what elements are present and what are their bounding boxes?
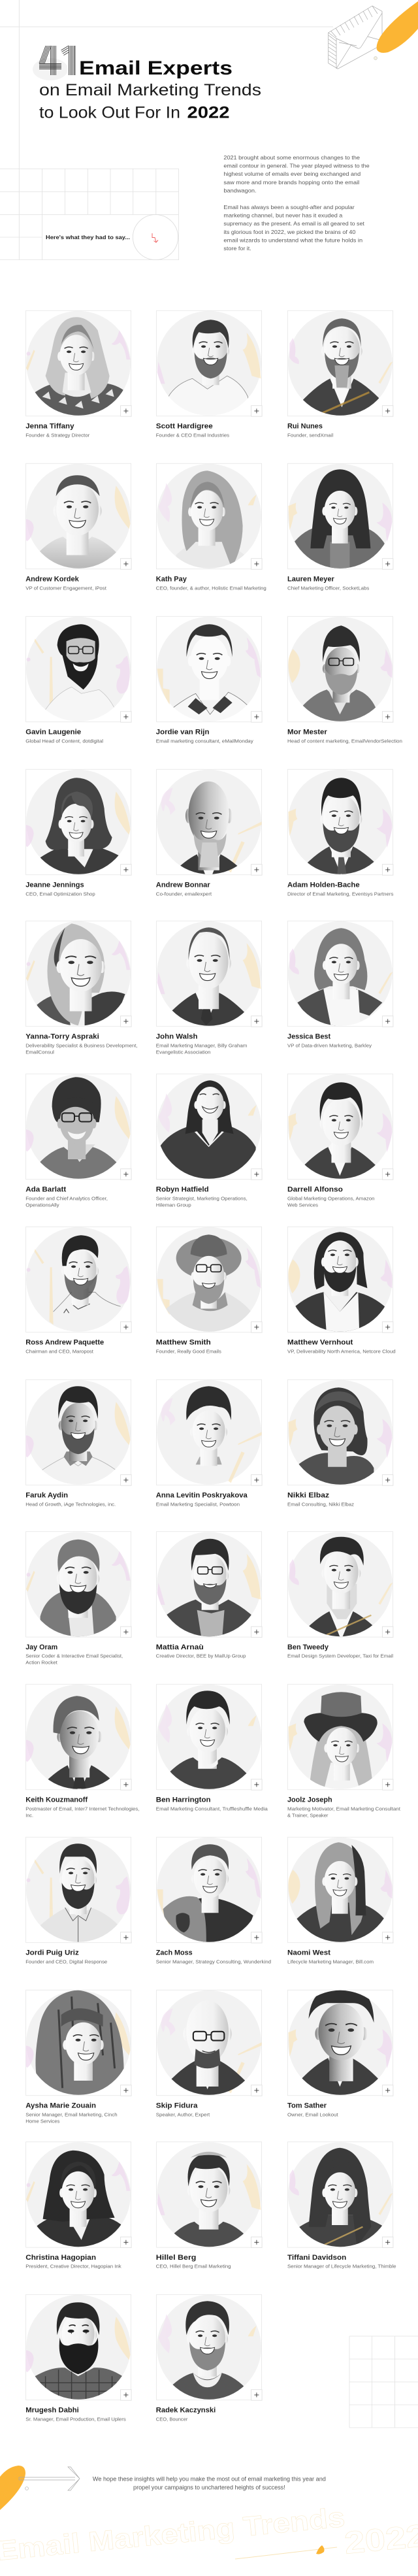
- portrait: Jay Oram: [40, 1540, 116, 1643]
- portrait: Keith Kouzmanoff: [33, 1696, 127, 1824]
- card: Andrew Kordek: [25, 463, 131, 591]
- name: Zach Moss: [156, 1949, 193, 1957]
- role: Marketing Motivator, Email Marketing Consultant: [287, 1806, 401, 1811]
- title line 3: to Look Out For In: [39, 105, 180, 122]
- role: Founder, sendXmail: [287, 432, 334, 438]
- role: Founder & CEO Email Industries: [156, 432, 229, 438]
- portrait: Ross Andrew Paquette: [54, 1235, 121, 1313]
- role: Senior Strategist, Marketing Operations,: [156, 1195, 248, 1201]
- portrait: Andrew Bonnar: [180, 782, 238, 874]
- icon: plus: [121, 406, 131, 416]
- portrait: Mattia Arnaù: [165, 1539, 253, 1643]
- role: Email Marketing Specialist, Powtoon: [156, 1501, 240, 1507]
- role: & Trainer, Speaker: [287, 1812, 329, 1818]
- portrait: Jeanne Jennings: [40, 778, 119, 874]
- icon: plus: [121, 712, 131, 722]
- intro text: Email has always been a sought-after and popular: [223, 204, 355, 210]
- intro text: marketing channel, but never has it exuded a: [223, 212, 343, 218]
- role: [156, 1195, 248, 1208]
- orange blob top right: [377, 1, 418, 53]
- portrait: Aysha Marie Zouain: [35, 1990, 124, 2095]
- role: Chief Marketing Officer, SocketLabs: [287, 585, 370, 591]
- name: John Walsh: [156, 1033, 198, 1041]
- role: President, Creative Director, Hagopian Ink: [25, 2264, 121, 2270]
- name: Andrew Kordek: [25, 576, 80, 584]
- name: Matthew Smith: [156, 1339, 211, 1347]
- name: Ben Tweedy: [287, 1643, 329, 1651]
- card: Jessica Best: [287, 921, 393, 1048]
- role: Global Head of Content, dotdigital: [25, 738, 103, 744]
- icon: plus: [382, 865, 393, 875]
- portrait: Andrew Kordek: [40, 475, 116, 569]
- card: Naomi West: [287, 1837, 393, 1964]
- role: CEO, Bouncer: [156, 2416, 188, 2422]
- footer outlined text: 2022: 2022: [343, 2518, 418, 2561]
- portrait: Kath Pay: [176, 471, 245, 574]
- card: Matthew Vernhout: [287, 1227, 396, 1354]
- name: Ada Barlatt: [25, 1186, 67, 1194]
- card: Robyn Hatfield: [156, 1074, 262, 1208]
- icon: plus: [251, 406, 262, 416]
- intro text: saw more and more brands hopping onto the email: [223, 179, 359, 186]
- icon: plus: [121, 559, 131, 569]
- icon: plus: [121, 1627, 131, 1638]
- card: Joolz Joseph: [287, 1684, 401, 1818]
- card: Aysha Marie Zouain: [25, 1990, 131, 2124]
- icon: plus: [251, 1779, 262, 1790]
- card: Yanna-Torry Aspraki: [25, 921, 138, 1055]
- name: Jordie van Rijn: [156, 729, 210, 736]
- name: Kath Pay: [156, 576, 187, 584]
- name: Adam Holden-Bache: [287, 882, 360, 889]
- card: Darrell Alfonso: [287, 1074, 393, 1208]
- role: Hileman Group: [156, 1202, 191, 1208]
- card: Ben Harrington: [156, 1684, 268, 1812]
- numeral 41: [33, 46, 75, 80]
- card: Ada Barlatt: [25, 1074, 131, 1208]
- role: Founder, Really Good Emails: [156, 1348, 221, 1354]
- portrait: Yanna-Torry Aspraki: [36, 923, 125, 1032]
- icon: plus: [382, 1322, 393, 1332]
- role: Action Rocket: [25, 1660, 58, 1666]
- role: Email Marketing Manager, Billy Graham: [156, 1042, 247, 1048]
- name: Mor Mester: [287, 729, 328, 736]
- icon: plus: [251, 712, 262, 722]
- card: Mrugesh Dabhi: [25, 2294, 131, 2422]
- role: [156, 1042, 247, 1055]
- role: Chairman and CEO, Maropost: [25, 1348, 94, 1354]
- portrait: Jordi Puig Uriz: [40, 1843, 119, 1948]
- icon: plus: [382, 2237, 393, 2248]
- name: Christina Hagopian: [25, 2254, 96, 2262]
- icon: plus: [382, 1016, 393, 1027]
- intro text: email contour in general. The year played witness to the: [223, 162, 370, 169]
- background rule lines top: [0, 0, 333, 260]
- portrait: Darrell Alfonso: [304, 1082, 376, 1179]
- portrait: Christina Hagopian: [36, 2151, 124, 2253]
- card: Faruk Aydin: [25, 1379, 131, 1507]
- name: Tom Sather: [287, 2102, 327, 2110]
- role: Email Marketing Consultant, Truffleshuffle Media: [156, 1806, 268, 1811]
- title line 3: [39, 105, 230, 122]
- small ring: [374, 57, 377, 59]
- envelope illustration: [329, 6, 382, 69]
- role: [25, 1806, 140, 1818]
- role: Founder and CEO, Digital Response: [25, 1958, 107, 1964]
- name: Andrew Bonnar: [156, 882, 210, 889]
- name: Mattia Arnaù: [156, 1643, 204, 1651]
- portrait: Rui Nunes: [303, 318, 379, 416]
- role: Email marketing consultant, eMailMonday: [156, 738, 253, 744]
- card: Ben Tweedy: [287, 1532, 393, 1670]
- role: Email Consulting, Nikki Elbaz: [287, 1501, 354, 1507]
- role: CEO, Email Optimization Shop: [25, 891, 95, 897]
- portrait: John Walsh: [172, 927, 244, 1026]
- intro text: store for it.: [223, 245, 251, 252]
- role: Deliverability Specialist & Business Development,: [25, 1042, 138, 1048]
- icon: plus: [121, 1475, 131, 1485]
- role: Founder and Chief Analytics Officer,: [25, 1195, 108, 1201]
- intro text: [223, 154, 370, 252]
- card: Christina Hagopian: [25, 2142, 131, 2270]
- name: Skip Fidura: [156, 2102, 198, 2110]
- name: Faruk Aydin: [25, 1492, 68, 1500]
- name: Scott Hardigree: [156, 423, 213, 431]
- icon: plus: [251, 1016, 262, 1027]
- portrait: Ben Tweedy: [294, 1537, 388, 1670]
- name: Joolz Joseph: [287, 1796, 332, 1804]
- name: Keith Kouzmanoff: [25, 1796, 88, 1804]
- role: VP of Data-driven Marketing, Barkley: [287, 1042, 372, 1048]
- icon: plus: [251, 1475, 262, 1485]
- role: VP of Customer Engagement, iPost: [25, 585, 107, 591]
- card: Gavin Laugenie: [25, 616, 131, 744]
- intro text: bandwagon.: [223, 187, 257, 193]
- call-to-read circle: [133, 214, 178, 260]
- portrait: Tiffani Davidson: [299, 2148, 384, 2253]
- name: Gavin Laugenie: [25, 729, 81, 736]
- icon: plus: [382, 406, 393, 416]
- card: Anna Levitin Poskryakova: [156, 1379, 262, 1507]
- icon: plus: [121, 1016, 131, 1027]
- icon: plus: [382, 712, 393, 722]
- title: [33, 46, 261, 122]
- role: Founder & Strategy Director: [25, 432, 90, 438]
- role: Senior Manager, Email Marketing, Cinch: [25, 2111, 118, 2117]
- role: Evangelistic Association: [156, 1049, 211, 1055]
- role: [25, 1195, 108, 1208]
- role: Senior Manager, Strategy Consulting, Wunderkind: [156, 1958, 271, 1964]
- portrait: Adam Holden-Bache: [307, 778, 374, 874]
- grid decoration bottom right: [349, 2336, 418, 2428]
- footer line: [235, 2547, 337, 2559]
- role: Global Marketing Operations, Amazon: [287, 1195, 374, 1201]
- card: Tiffani Davidson: [287, 2142, 396, 2270]
- role: Senior Manager of Lifecycle Marketing, Thimble: [287, 2264, 396, 2270]
- portrait: Skip Fidura: [161, 2000, 255, 2119]
- role: VP, Deliverability North America, Netcore Cloud: [287, 1348, 396, 1354]
- icon: plus: [251, 2085, 262, 2096]
- title line 3: 2022: [187, 105, 230, 122]
- role: Director of Email Marketing, Eventsys Partners: [287, 891, 394, 897]
- closing text: [93, 2475, 326, 2491]
- portrait: Jenna Tiffany: [35, 317, 124, 421]
- portrait: Scott Hardigree: [169, 320, 248, 399]
- role: Postmaster of Email, Inter7 Internet Technologies,: [25, 1806, 140, 1811]
- role: Head of content marketing, EmailVendorSelection: [287, 738, 402, 744]
- icon: plus: [251, 2390, 262, 2400]
- portrait: Ben Harrington: [161, 1691, 255, 1812]
- portrait: Hillel Berg: [162, 2152, 256, 2277]
- role: [25, 2111, 118, 2124]
- intro text: highest volume of emails ever being exchanged and: [223, 171, 361, 177]
- icon: plus: [251, 559, 262, 569]
- name: Jay Oram: [25, 1643, 57, 1651]
- card: Jenna Tiffany: [25, 310, 131, 438]
- portrait: Matthew Vernhout: [293, 1232, 387, 1338]
- closing text: We hope these insights will help you make the most out of email marketing this year and: [93, 2475, 326, 2482]
- portrait: Naomi West: [297, 1842, 384, 1948]
- icon: plus: [121, 865, 131, 875]
- portrait: Radek Kaczynski: [161, 2301, 255, 2428]
- role: EmailConsul: [25, 1049, 54, 1055]
- icon: plus: [382, 2085, 393, 2096]
- portrait: Lauren Meyer: [291, 469, 385, 574]
- intro text: its glorious foot in 2022, we picked the brains of 40: [223, 229, 356, 235]
- card: Scott Hardigree: [156, 310, 262, 438]
- name: Hillel Berg: [156, 2254, 196, 2262]
- icon: plus: [121, 2390, 131, 2400]
- name: Darrell Alfonso: [287, 1186, 343, 1194]
- portrait: Nikki Elbaz: [298, 1387, 374, 1491]
- portrait: Faruk Aydin: [40, 1386, 118, 1471]
- name: Naomi West: [287, 1949, 330, 1957]
- role: [25, 1653, 123, 1666]
- grid decoration left: [0, 169, 179, 260]
- portrait: Robyn Hatfield: [161, 1080, 256, 1185]
- name: Jordi Puig Uriz: [25, 1949, 79, 1957]
- card: Lauren Meyer: [287, 463, 393, 591]
- here's what they had to say: Here's what they had to say...: [46, 234, 130, 240]
- card: Kath Pay: [156, 463, 266, 591]
- portrait: Mor Mester: [300, 625, 376, 727]
- icon: plus: [382, 1169, 393, 1180]
- card: Matthew Smith: [156, 1227, 262, 1354]
- icon: plus: [251, 2237, 262, 2248]
- role: Home Services: [25, 2118, 60, 2124]
- role: CEO, Hillel Berg Email Marketing: [156, 2264, 231, 2270]
- portrait: Jessica Best: [297, 928, 382, 1032]
- icon: plus: [121, 1779, 131, 1790]
- card: Tom Sather: [287, 1990, 393, 2117]
- name: Anna Levitin Poskryakova: [156, 1492, 248, 1500]
- role: Sr. Manager, Email Production, Email Uplers: [25, 2416, 126, 2422]
- role: Senior Coder & Interactive Email Specialist,: [25, 1653, 123, 1659]
- role: Inc.: [25, 1812, 33, 1818]
- card: John Walsh: [156, 921, 262, 1055]
- icon: plus: [382, 559, 393, 569]
- name: Lauren Meyer: [287, 576, 335, 584]
- portrait: Tom Sather: [293, 1990, 387, 2117]
- icon: plus: [251, 1627, 262, 1638]
- title line 2: on Email Marketing Trends: [39, 82, 261, 99]
- portrait: Mrugesh Dabhi: [35, 2302, 123, 2405]
- portrait: Ada Barlatt: [40, 1077, 116, 1179]
- icon: red arrow: [152, 233, 158, 242]
- role: CEO, founder, & author, Holistic Email Marketing: [156, 585, 266, 591]
- portrait: Joolz Joseph: [304, 1692, 379, 1795]
- icon: plus: [382, 1779, 393, 1790]
- name: Rui Nunes: [287, 423, 323, 431]
- name: Jeanne Jennings: [25, 882, 84, 889]
- portrait: Anna Levitin Poskryakova: [186, 1386, 231, 1466]
- icon: plus: [382, 1475, 393, 1485]
- name: Aysha Marie Zouain: [25, 2102, 96, 2110]
- title line 1: Email Experts: [79, 58, 233, 79]
- role: [287, 1806, 401, 1818]
- icon: plus: [121, 1322, 131, 1332]
- role: OperationsAlly: [25, 1202, 59, 1208]
- small ring: [25, 2487, 28, 2490]
- intro text: supremacy as the present. As email is all geared to set: [223, 220, 364, 227]
- card: Adam Holden-Bache: [287, 769, 394, 905]
- icon: plus: [121, 1169, 131, 1180]
- icon: plus: [382, 1932, 393, 1943]
- name: Ross Andrew Paquette: [25, 1339, 104, 1347]
- name: Matthew Vernhout: [287, 1339, 353, 1347]
- arrow: [19, 2467, 80, 2490]
- card: Jordi Puig Uriz: [25, 1837, 131, 1964]
- intro text: email wizards to understand what the future holds in: [223, 237, 362, 243]
- card: Mor Mester: [287, 616, 402, 744]
- card: Jay Oram: [25, 1532, 131, 1666]
- role: Web Services: [287, 1202, 318, 1208]
- icon: plus: [251, 1932, 262, 1943]
- name: Nikki Elbaz: [287, 1492, 330, 1500]
- role: Email Design System Developer, Taxi for Email: [287, 1653, 393, 1659]
- role: [287, 1195, 375, 1208]
- role: Head of Growth, iAge Technologies, inc.: [25, 1501, 116, 1507]
- footer outlined text: Email Marketing Trends: Email Marketing Trends: [0, 2502, 346, 2566]
- card: Rui Nunes: [287, 310, 393, 438]
- portrait: Jordie van Rijn: [174, 624, 247, 715]
- icon: plus: [382, 1627, 393, 1638]
- name: Yanna-Torry Aspraki: [25, 1033, 99, 1041]
- card: Mattia Arnaù: [156, 1532, 262, 1659]
- icon: plus: [121, 1932, 131, 1943]
- card: Ross Andrew Paquette: [25, 1227, 131, 1354]
- icon: plus: [121, 2237, 131, 2248]
- card: Keith Kouzmanoff: [25, 1684, 140, 1824]
- card: Radek Kaczynski: [156, 2294, 262, 2428]
- icon: plus: [251, 865, 262, 875]
- closing text: propel your campaigns to unchartered heights of success!: [133, 2484, 285, 2491]
- name: Tiffani Davidson: [287, 2254, 346, 2262]
- orange half disc: [316, 2545, 325, 2554]
- name: Mrugesh Dabhi: [25, 2407, 79, 2415]
- portrait: Zach Moss: [163, 1844, 253, 1948]
- portrait: Matthew Smith: [167, 1234, 251, 1338]
- name: Ben Harrington: [156, 1796, 211, 1804]
- role: Lifecycle Marketing Manager, Bill.com: [287, 1958, 374, 1964]
- portrait: Gavin Laugenie: [46, 624, 114, 714]
- card: Nikki Elbaz: [287, 1379, 393, 1507]
- name: Jessica Best: [287, 1033, 330, 1041]
- icon: plus: [121, 2085, 131, 2096]
- role: Owner, Email Lookout: [287, 2111, 339, 2117]
- icon: plus: [251, 1169, 262, 1180]
- icon: plus: [251, 1322, 262, 1332]
- card: Jordie van Rijn: [156, 616, 262, 744]
- name: Radek Kaczynski: [156, 2407, 216, 2415]
- role: Co-founder, emailexpert: [156, 891, 212, 897]
- card: Hillel Berg: [156, 2142, 262, 2277]
- name: Jenna Tiffany: [25, 423, 74, 431]
- role: Speaker, Author, Expert: [156, 2111, 210, 2117]
- card: Zach Moss: [156, 1837, 271, 1964]
- role: Creative Director, BEE by MailUp Group: [156, 1653, 246, 1659]
- role: [25, 1042, 138, 1055]
- orange blob bottom left: [0, 2466, 25, 2510]
- intro text: 2021 brought about some enormous changes to the: [223, 154, 360, 161]
- card: Skip Fidura: [156, 1990, 262, 2119]
- card: Andrew Bonnar: [156, 769, 263, 897]
- card: Jeanne Jennings: [25, 769, 131, 897]
- name: Robyn Hatfield: [156, 1186, 209, 1194]
